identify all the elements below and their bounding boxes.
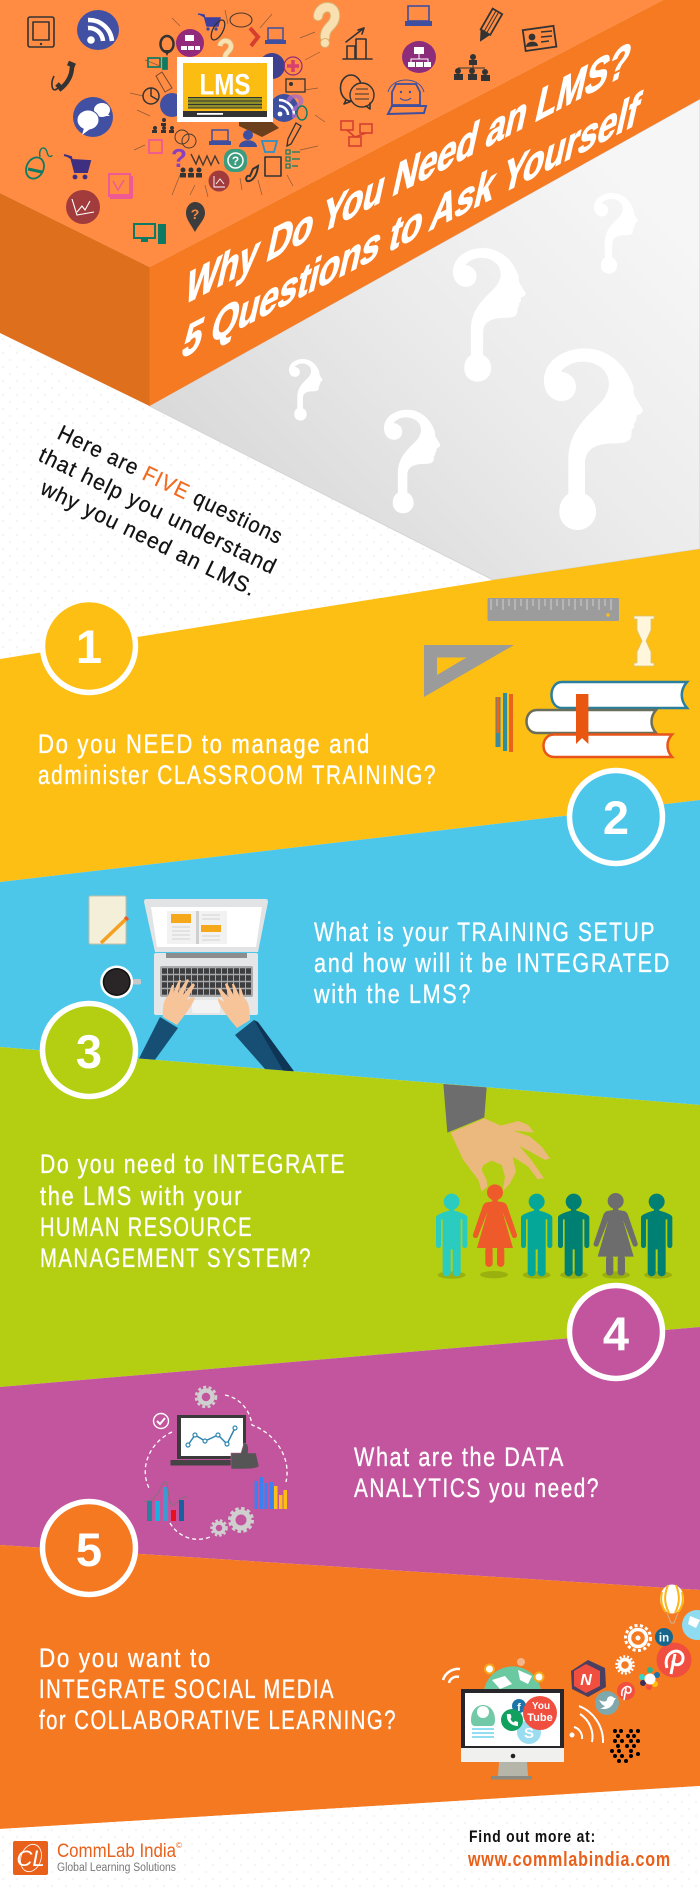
footer call to action: Find out more at:: [469, 1827, 596, 1846]
icon: right sleeve: [235, 1020, 294, 1071]
icon: phone bubble: [501, 1709, 523, 1731]
icon: Facebook: f: [517, 1702, 521, 1714]
icon: dashed cycle arrows: [145, 1395, 287, 1539]
icon: hexagon N: N: [580, 1672, 592, 1689]
icon: small team: [152, 118, 174, 133]
question 3 text: Do you need to INTEGRATE: [40, 1149, 346, 1179]
question 3 text: the LMS with your: [40, 1181, 243, 1211]
illustration: hand picking a person: [436, 1084, 672, 1279]
number badge 2: 2: [603, 791, 629, 844]
icon: thumbs up: [231, 1443, 259, 1469]
icon: picking hand: [451, 1118, 550, 1192]
icon: cloud doodle: [230, 13, 252, 27]
question 4 text: [354, 1442, 600, 1503]
icon: blue circle behind laptop right: [259, 53, 285, 79]
icon: right bar chart: [254, 1477, 287, 1509]
title: Why Do You Need an LMS?: [181, 31, 636, 316]
icon: Twitter: [595, 1691, 619, 1715]
icon: left bar chart: [143, 1481, 187, 1521]
icon: black dot arrow: [610, 1729, 640, 1763]
icon: blue chat circle behind laptop: [160, 93, 184, 117]
icon: small desktop: [148, 58, 167, 69]
panel: question 2 blue band: [0, 800, 700, 1105]
icon: left sleeve: [139, 1017, 178, 1060]
icon: hands typing: [163, 979, 250, 1028]
icon: monitor: [461, 1689, 564, 1780]
intro text: Here are FIVE questions: [54, 420, 287, 549]
question 1 text: [38, 729, 437, 790]
icon: green question circle: ?: [232, 154, 239, 168]
question 3 text: HUMAN RESOURCE: [40, 1212, 253, 1242]
icon: pencil: [475, 9, 502, 44]
illustration: books and tools: [424, 598, 687, 757]
footer call to action: [467, 1827, 671, 1871]
icon: small laptop: [265, 28, 286, 44]
icon: RSS small: [270, 94, 298, 122]
icon: laptop with line chart: [170, 1415, 246, 1466]
panel: left face of title box: [0, 193, 150, 406]
icon: purple question overlay: ?: [285, 88, 305, 126]
icon: small phone: [246, 166, 258, 181]
icon: id card small: [286, 79, 305, 92]
icon: pie chart: [143, 88, 159, 104]
icon: Pinterest small: [617, 1682, 635, 1700]
question 5 text: INTEGRATE SOCIAL MEDIA: [39, 1674, 335, 1704]
logo copyright: ©: [176, 1841, 182, 1850]
icons: scattered doodles on top face: [23, 6, 556, 244]
icon: grey sleeve: [443, 1084, 487, 1133]
footer logo: [13, 1841, 182, 1875]
icon: small pink monitor: [149, 140, 162, 153]
icon: small pencil: [287, 123, 301, 146]
icon: dark question pin small: [160, 36, 174, 56]
icon: wifi signal right: [570, 1706, 603, 1743]
number badge 4: 4: [603, 1307, 629, 1360]
icon: laptop screen: [144, 899, 268, 952]
icon: LinkedIn: [655, 1628, 673, 1646]
number badge 5: [42, 1502, 136, 1594]
icon: Pinterest large: [656, 1642, 692, 1678]
icon: person dark teal right: [641, 1194, 672, 1276]
icon: hexagon N: [571, 1660, 606, 1697]
icon: YouTube: Tube: [527, 1712, 553, 1724]
icon: id card: [523, 26, 556, 51]
question 3 text: MANAGEMENT SYSTEM?: [40, 1243, 312, 1273]
number badge 1: 1: [76, 620, 102, 673]
icon: speech bubbles: [340, 75, 374, 109]
icon: ruler: [488, 598, 619, 621]
icon: woman orange: [473, 1184, 517, 1267]
icon: bar chart with arrow: [343, 28, 372, 59]
icon: chat bubble circle: [73, 97, 113, 137]
icon: check circle: [154, 1414, 168, 1428]
logo tagline: Global Learning Solutions: [57, 1862, 176, 1874]
icon: paper clip: [208, 18, 228, 42]
number badge 5: 5: [76, 1523, 102, 1576]
icon: globe: [484, 1666, 541, 1690]
icon: laptop base and keyboard: [154, 953, 258, 1015]
icon: org chart circle: [402, 41, 436, 73]
panel: front face of title box: [150, 0, 700, 406]
illustration: social media monitor: [443, 1584, 700, 1780]
icon: tag: [156, 72, 172, 92]
icon: question pin: ?: [191, 206, 199, 222]
icon: small tablet: [265, 157, 281, 176]
number badge 2: [570, 770, 662, 864]
icon: figure shadows: [438, 1271, 672, 1279]
icon: person teal: [521, 1194, 552, 1276]
title: 5 Questions to Ask Yourself: [178, 82, 645, 370]
icon: flower of dots: [639, 1667, 660, 1690]
icon: small people: [180, 168, 202, 178]
icon: desktop computer: [134, 224, 166, 244]
question 5 text: [39, 1643, 397, 1735]
number badge 1: [42, 600, 136, 692]
icon: purple question small: ?: [171, 143, 187, 173]
panel: question 1 yellow band: [0, 549, 700, 882]
icon: cluster cart: [198, 14, 220, 31]
icon: small gear: [212, 1520, 226, 1536]
icon: shopping cart: [64, 155, 90, 179]
panel: question 3 green band: [0, 1047, 700, 1387]
icon: laptop outline right: [405, 6, 432, 26]
icon: white gear large: [626, 1626, 650, 1650]
icon: coffee cup: [100, 966, 141, 998]
icon: CL logo mark: [13, 1841, 48, 1875]
icon: YouTube: [523, 1696, 557, 1730]
icon: cream question mark: [318, 7, 335, 48]
doodle radiating ticks: [130, 10, 325, 197]
icon: scribble: [191, 154, 219, 165]
intro text: why you need an LMS.: [36, 475, 261, 601]
icon: green question circle: [224, 149, 247, 172]
icon: wifi signal left: [443, 1669, 460, 1683]
icon: RSS circle: [77, 10, 119, 50]
question 1 text: administer CLASSROOM TRAINING?: [38, 760, 437, 790]
panel: question 4 purple band: [0, 1327, 700, 1590]
panel: top face of title box: [0, 0, 663, 267]
number badge 3: [42, 1004, 136, 1096]
question 2 text: [313, 917, 671, 1009]
icon: head-shaped question marks: [289, 193, 643, 530]
icon: graph circle small: [208, 170, 230, 192]
intro text: that help you understand: [35, 442, 281, 579]
number badge 4: [570, 1286, 662, 1378]
panel: intro white background: [0, 333, 493, 659]
icon: team hierarchy: [454, 54, 490, 81]
question 4 text: ANALYTICS you need?: [354, 1473, 600, 1503]
icon: woman grey: [594, 1193, 638, 1276]
icon: person: [239, 130, 257, 147]
icon: Skype bubble: [517, 1720, 541, 1744]
icon: pens: [496, 693, 513, 752]
icon: hourglass: [634, 616, 654, 666]
icon: profile avatar: [471, 1705, 495, 1737]
icon: checklist: [286, 150, 300, 168]
question 1 text: Do you NEED to manage and: [38, 729, 371, 759]
icon: white gear small: [616, 1656, 634, 1674]
panel: footer white band: [0, 1786, 700, 1888]
logo name: CommLab India: [57, 1841, 176, 1862]
icon: growth chart circle: [66, 190, 100, 224]
icon: pink monitor: [109, 174, 133, 199]
panel: question 5 orange band: [0, 1545, 700, 1829]
panel: grey question-mark wall: [150, 99, 700, 580]
icon: smiling laptop: [388, 80, 426, 114]
question 2 text: with the LMS?: [313, 979, 472, 1009]
icon: tablet: [28, 17, 54, 47]
icon: small speech doodle: [175, 130, 196, 148]
icon: YouTube: You: [532, 1701, 550, 1712]
icon: top gear: [196, 1387, 216, 1407]
icon: hot air balloon: [660, 1584, 684, 1623]
icon: location pins: [485, 1658, 544, 1682]
illustration: data analytics: [143, 1387, 287, 1539]
icon: CL logo mark: CL: [16, 1846, 45, 1871]
icon: LinkedIn: in: [659, 1632, 669, 1644]
icon: notebook and pencil: [89, 896, 128, 944]
question 5 text: Do you want to: [39, 1643, 212, 1673]
icon: LMS video laptop: [177, 57, 273, 122]
icon: large gear: [230, 1508, 252, 1532]
icon: blue cart small: [262, 141, 277, 152]
icon: org circle in cluster: [176, 29, 204, 57]
icon: question pin: [186, 202, 205, 232]
icon: globe right: [682, 1610, 700, 1640]
icon: keyboard doodle: [239, 122, 279, 137]
icon: stacked books: [526, 682, 687, 757]
icon: red chevron: [250, 28, 258, 46]
illustration: laptop and hands: [89, 896, 294, 1071]
icon: person teal light: [436, 1194, 467, 1276]
icon: set square: [424, 645, 514, 697]
question 5 text: for COLLABORATIVE LEARNING?: [39, 1705, 397, 1735]
icon: cream question above laptop: [220, 41, 231, 58]
question 3 text: [40, 1149, 346, 1273]
question 4 text: What are the DATA: [354, 1442, 565, 1472]
icon: small mouse: [297, 106, 307, 120]
icon: Facebook: [512, 1699, 526, 1714]
icon: small smiling laptop: [209, 130, 231, 145]
icon: Skype bubble: S: [524, 1725, 534, 1742]
icon: phone handset: [52, 63, 75, 90]
icon: mouse: [23, 148, 52, 182]
icon: person dark teal: [558, 1194, 589, 1276]
icon: plus circle: [284, 57, 302, 75]
number badge 3: 3: [76, 1025, 102, 1078]
icon: LMS video laptop: LMS: [200, 68, 250, 102]
icon: red org boxes: [341, 121, 372, 146]
